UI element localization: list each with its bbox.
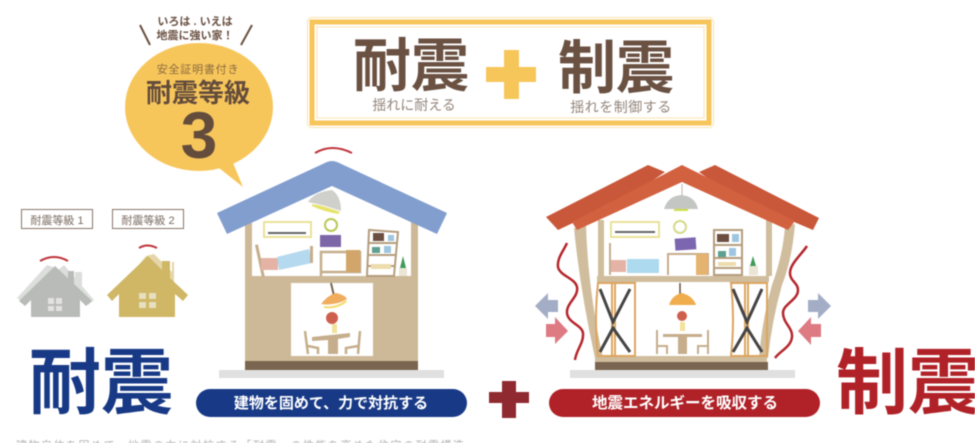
label: grade 1	[22, 210, 92, 228]
pill: absorb: 地震エネルギーを吸収する	[592, 394, 778, 412]
arrow: right blue	[808, 293, 831, 319]
wave: right	[775, 246, 807, 358]
title box: 制震	[558, 36, 674, 101]
label: grade 2	[112, 210, 184, 228]
icon: gold house	[107, 246, 188, 317]
pill: absorb	[549, 389, 820, 417]
title box: 揺れを制御する	[570, 99, 672, 115]
callout: seismic grade 3: いろは . いえは	[157, 15, 233, 28]
callout: seismic grade 3	[125, 15, 273, 187]
title box	[308, 18, 714, 128]
red house	[546, 165, 819, 378]
callout: seismic grade 3: 安全証明書付き	[157, 62, 239, 76]
blue house	[217, 148, 447, 378]
callout: seismic grade 3: 地震に強い家！	[156, 28, 234, 42]
wave: left	[558, 243, 583, 360]
callout: seismic grade 3: 耐震等級	[146, 78, 250, 108]
title box: 揺れに耐える	[372, 97, 456, 113]
icon: grey house	[17, 257, 94, 317]
pill: resist: 建物を固めて、力で対抗する	[234, 394, 428, 412]
label: grade 1: 耐震等級 1	[30, 213, 84, 227]
arrow: left red	[546, 317, 568, 344]
pill: resist	[196, 389, 467, 417]
heading: taishin: 耐震	[29, 344, 173, 424]
title box: 耐震	[353, 34, 469, 99]
callout: seismic grade 3: 3	[181, 98, 217, 172]
plus sign	[489, 381, 529, 418]
label: grade 2: 耐震等級 2	[121, 213, 175, 227]
arrow: left blue	[535, 293, 558, 319]
arrow: right red	[798, 317, 821, 345]
